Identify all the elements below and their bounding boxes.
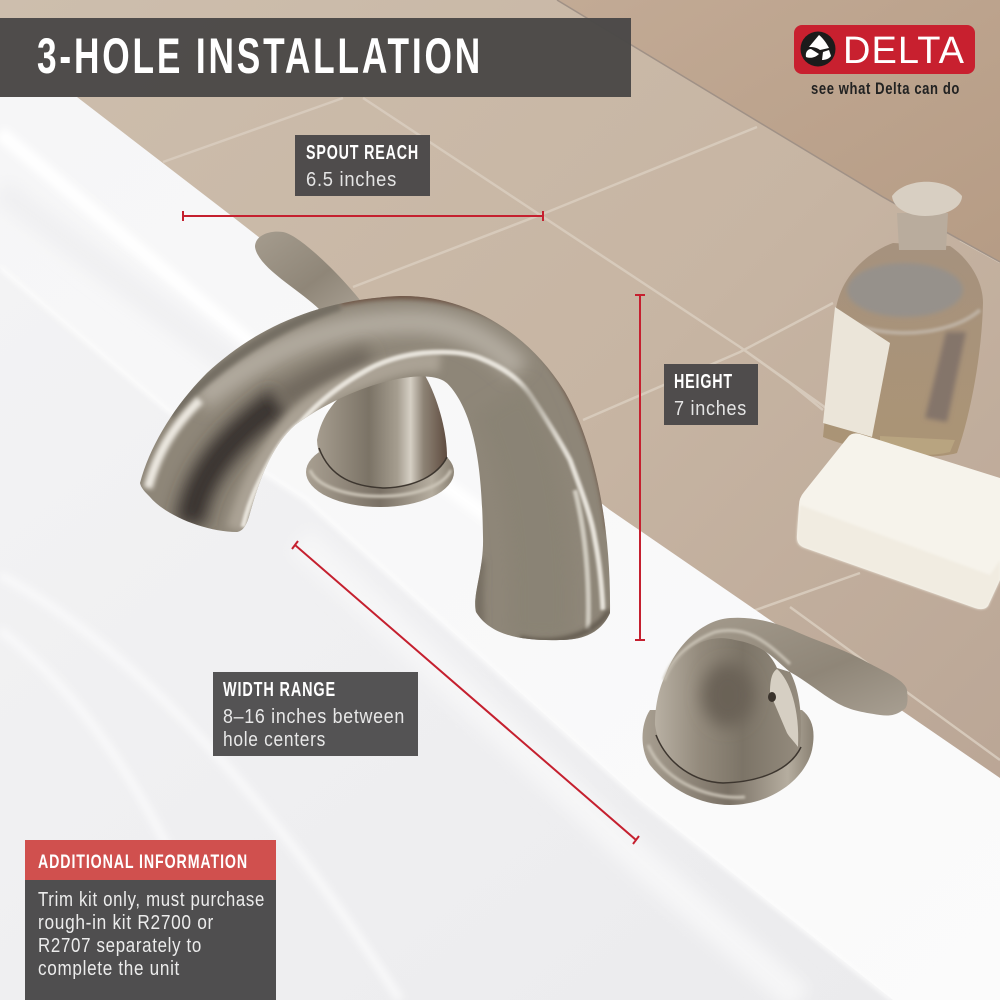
arrow: width range dimension: [292, 541, 639, 844]
panel: additional information: [25, 840, 276, 1000]
header banner: [0, 18, 631, 97]
callout: width range: [213, 672, 418, 756]
bottle label: [823, 307, 890, 437]
panel heading: ADDITIONAL INFORMATION: [38, 852, 248, 873]
callout: width range: hole centers: [223, 729, 326, 751]
callout: spout reach: [295, 135, 430, 196]
Delta logo: DELTA: [843, 30, 965, 72]
callout: height: HEIGHT: [674, 371, 733, 393]
arrow: height dimension: [635, 295, 645, 640]
panel: additional information: Trim kit only, must purchase: [38, 889, 265, 911]
callout: height: [664, 364, 758, 425]
front handle: [642, 618, 908, 805]
soap bar: [797, 433, 1000, 609]
bottle: [823, 182, 983, 456]
callout: width range: WIDTH RANGE: [223, 679, 336, 701]
panel: additional information: R2707 separately to: [38, 935, 202, 957]
panel heading: [25, 840, 276, 880]
Delta logo: see what Delta can do: [811, 79, 960, 98]
arrow: spout reach dimension: [183, 211, 543, 221]
callout: height: 7 inches: [674, 398, 747, 420]
back handle: [255, 232, 454, 507]
callout: spout reach: SPOUT REACH: [306, 142, 419, 164]
Delta logo: [794, 25, 975, 98]
icon: Delta triangle mark: [800, 32, 836, 66]
title: 3-HOLE INSTALLATION: [37, 28, 483, 84]
panel: additional information: rough-in kit R2700 or: [38, 912, 214, 934]
callout: width range: 8–16 inches between: [223, 706, 405, 728]
spout: [140, 293, 612, 641]
callout: spout reach: 6.5 inches: [306, 169, 397, 191]
panel: additional information: complete the unit: [38, 958, 180, 980]
